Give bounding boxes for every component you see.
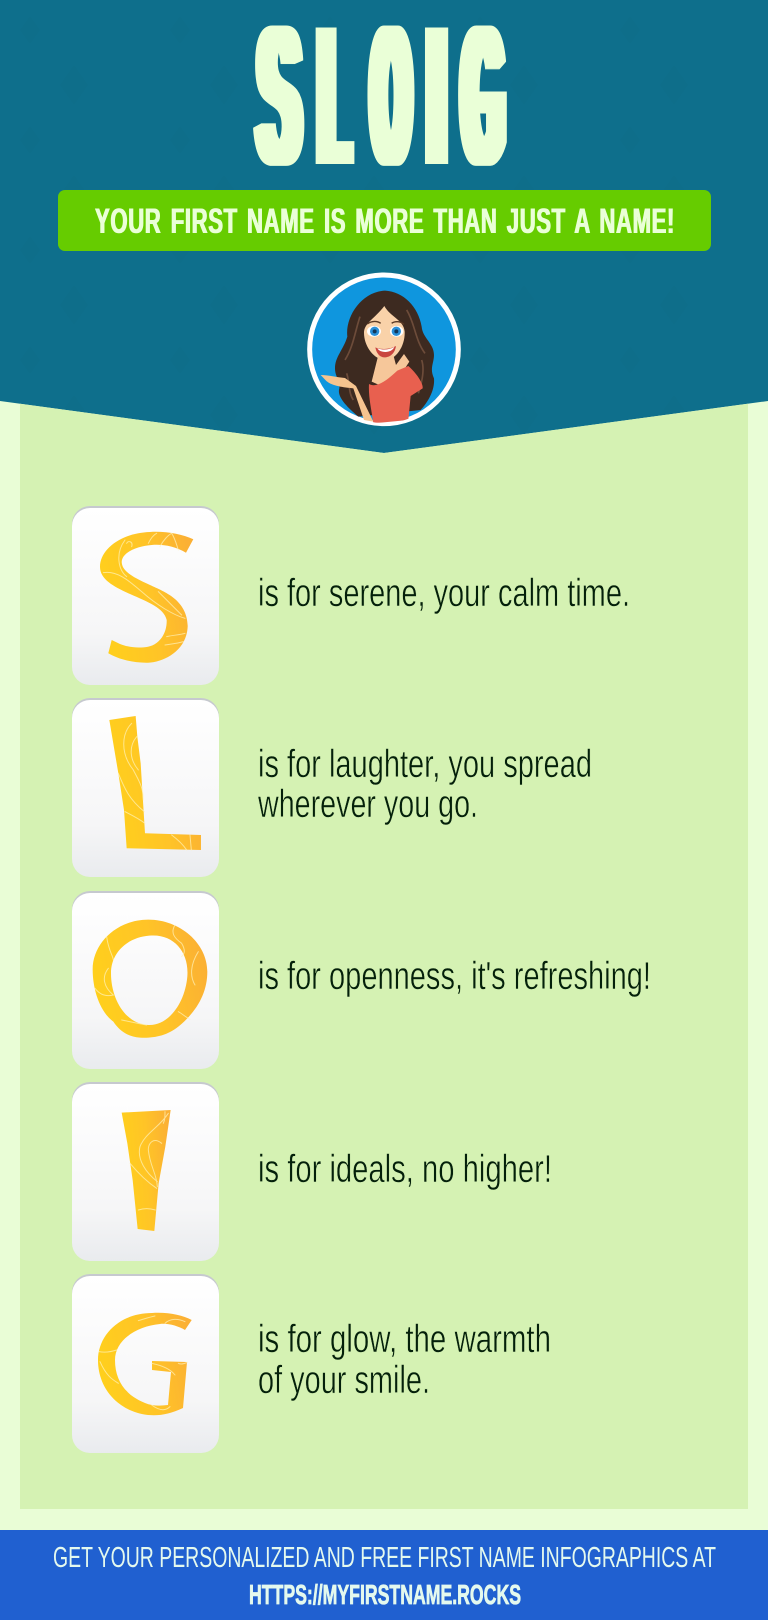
row L xyxy=(72,700,592,877)
letter S xyxy=(100,532,193,663)
row I xyxy=(72,1084,552,1261)
footer xyxy=(0,1530,768,1620)
content panel with chevron top xyxy=(0,401,768,1530)
row S xyxy=(72,508,630,685)
letter L xyxy=(109,716,201,850)
text I: is for ideals, no higher! xyxy=(258,1148,552,1191)
letter G xyxy=(98,1313,192,1415)
card L xyxy=(72,700,219,877)
row O xyxy=(72,893,651,1069)
letter I xyxy=(122,1110,171,1231)
card I xyxy=(72,1084,219,1261)
avatar illustration xyxy=(310,275,458,424)
row G: of your smile. xyxy=(258,1359,430,1402)
row L: wherever you go. xyxy=(257,783,478,826)
text G: is for glow, the warmth xyxy=(258,1318,551,1361)
banner xyxy=(58,190,711,251)
header band xyxy=(0,0,768,460)
card G xyxy=(72,1276,219,1453)
letter O xyxy=(93,920,207,1038)
footer url: HTTPS://MYFIRSTNAME.ROCKS xyxy=(249,1579,521,1610)
text S: is for serene, your calm time. xyxy=(258,572,630,615)
card S xyxy=(72,508,219,685)
text L: is for laughter, you spread xyxy=(258,743,592,786)
row G xyxy=(72,1276,551,1453)
title xyxy=(258,0,503,206)
card O xyxy=(72,893,219,1069)
